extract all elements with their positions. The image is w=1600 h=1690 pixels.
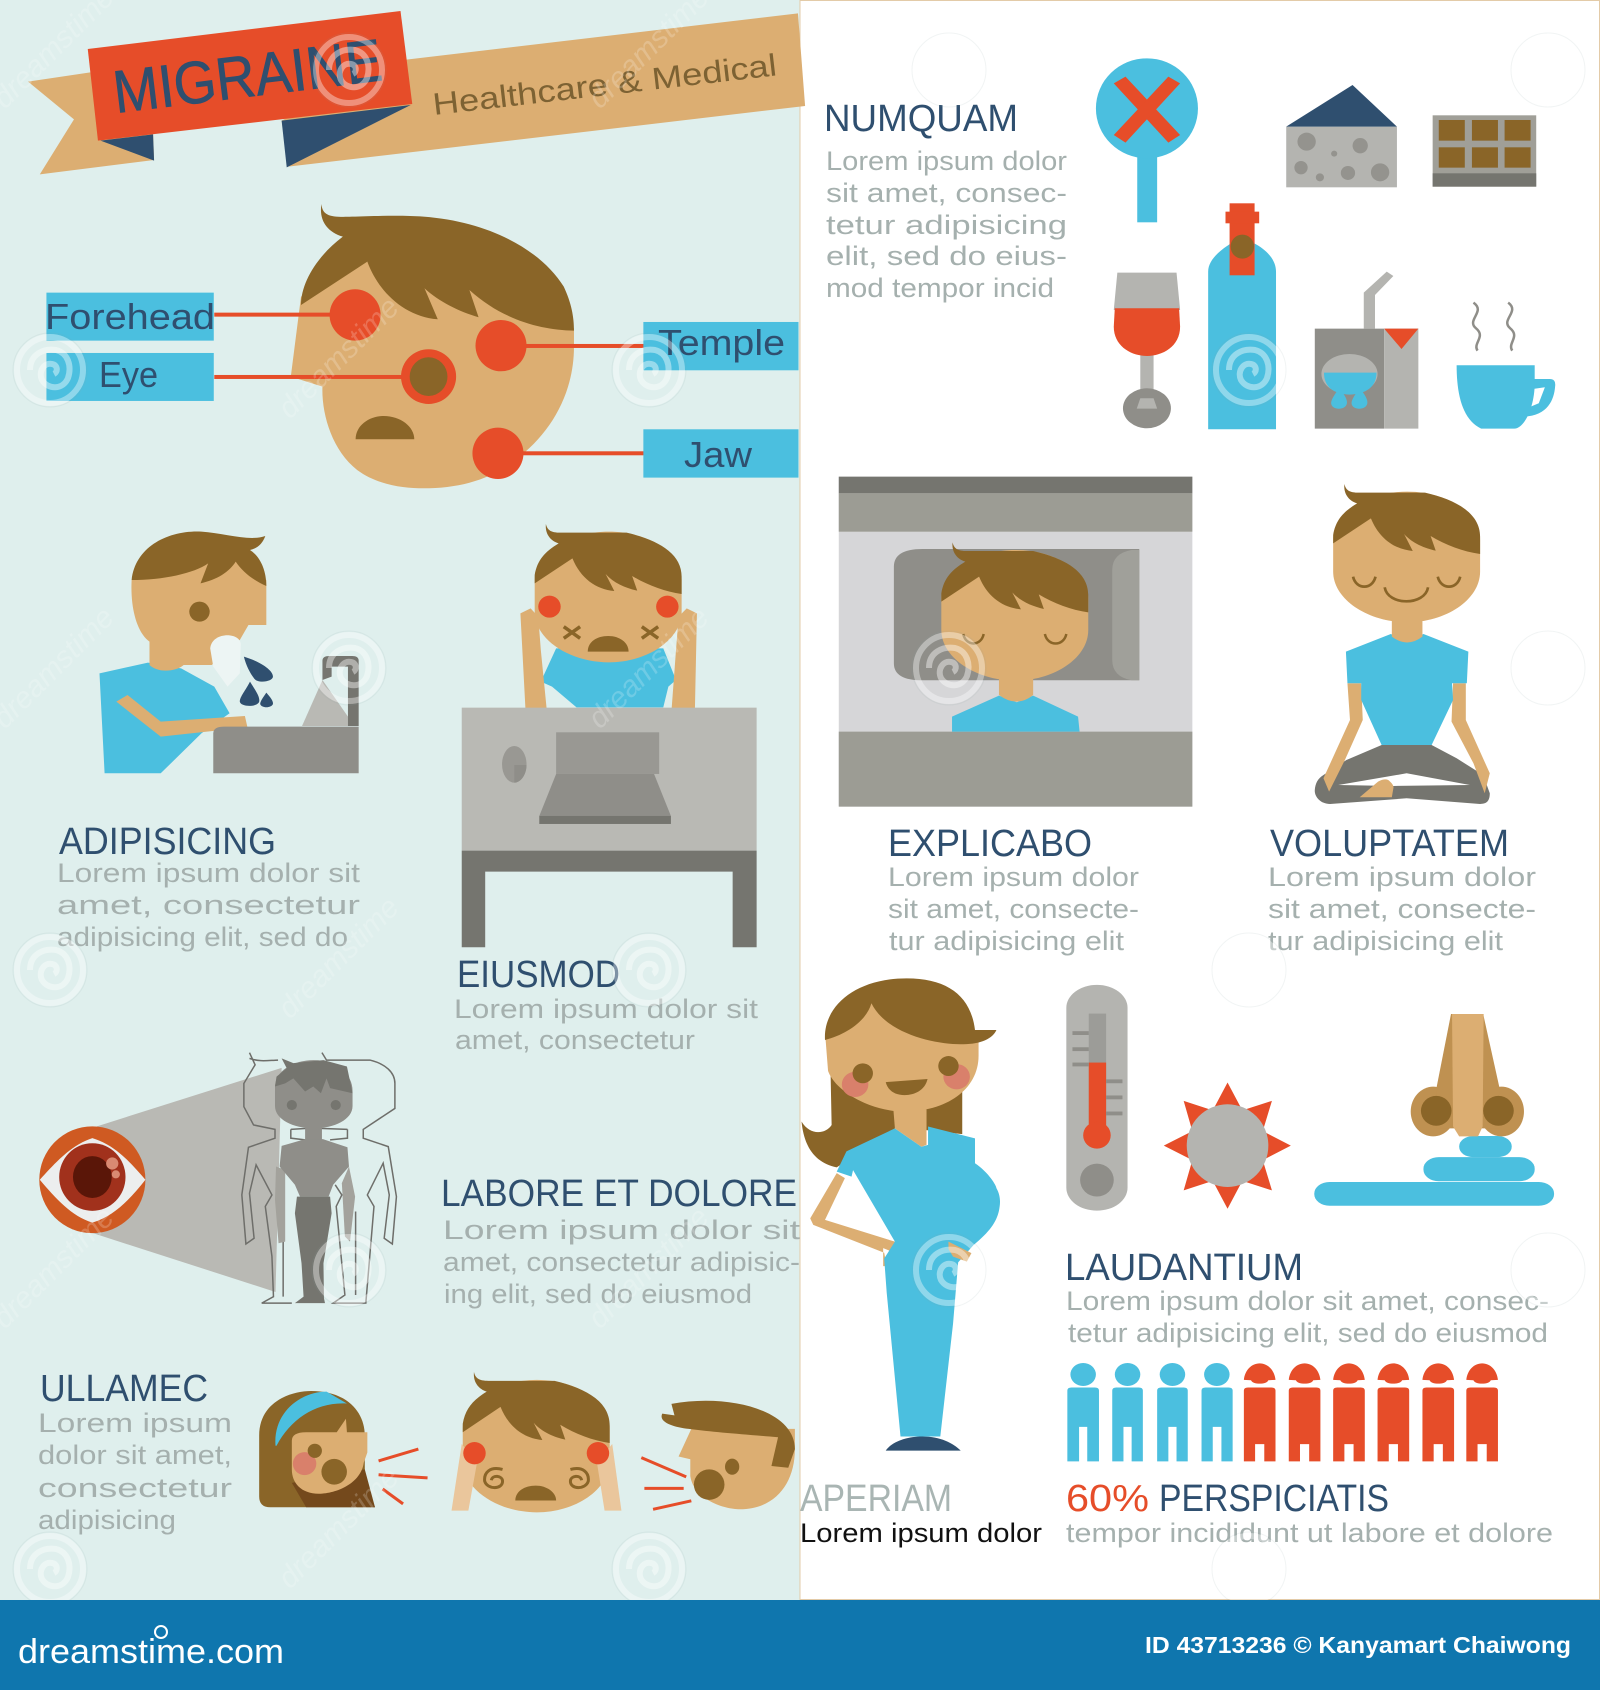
body text: Lorem ipsum dolor sit amet, consec- bbox=[1066, 1286, 1549, 1316]
stat: 60%: 60% bbox=[1066, 1478, 1149, 1520]
body text bbox=[826, 146, 1067, 303]
icon: wine glass bbox=[1114, 273, 1180, 428]
body text: tur adipisicing elit bbox=[1268, 926, 1504, 956]
body text: amet, consectetur bbox=[455, 1025, 695, 1055]
heading: LABORE ET DOLORE bbox=[441, 1173, 797, 1215]
heading: ULLAMEC bbox=[40, 1368, 208, 1410]
body text: adipisicing bbox=[38, 1505, 176, 1535]
body text: sit amet, consecte- bbox=[1268, 894, 1536, 924]
footer bar bbox=[0, 1600, 1600, 1690]
body text bbox=[1066, 1286, 1549, 1348]
body text: sit amet, consecte- bbox=[888, 894, 1139, 924]
panel: labore et dolore (double vision) bbox=[39, 1053, 801, 1309]
icon: bottle bbox=[1208, 203, 1276, 429]
blue people bbox=[1067, 1363, 1233, 1461]
icon: man sleeping in bed bbox=[839, 477, 1192, 807]
body text: Lorem ipsum dolor bbox=[1268, 862, 1536, 892]
body text bbox=[57, 858, 361, 952]
icon: hot cup bbox=[1457, 303, 1555, 429]
icon: cheese bbox=[1286, 85, 1397, 187]
icon: people shouting at man bbox=[259, 1372, 795, 1512]
icons bbox=[1066, 985, 1554, 1461]
right panel background bbox=[800, 0, 1600, 1600]
heading: ADIPISICING bbox=[59, 821, 276, 863]
watermark text: dreamstime bbox=[272, 891, 406, 1025]
body text: tur adipisicing elit bbox=[889, 926, 1125, 956]
panel: laudantium (thermometer, sun, nose) bbox=[1065, 985, 1554, 1548]
panel: voluptatem (meditating man) bbox=[1268, 484, 1536, 956]
heading: VOLUPTATEM bbox=[1270, 823, 1509, 865]
footer logo: dreamstime.com bbox=[18, 1633, 284, 1671]
panel: numquam (trigger foods) bbox=[824, 58, 1555, 429]
body text: tetur adipisicing elit, sed do eiusmod bbox=[1068, 1318, 1548, 1348]
red people bbox=[1244, 1363, 1498, 1461]
body text: mod tempor incid bbox=[826, 273, 1054, 303]
icon: milk carton bbox=[1315, 272, 1418, 429]
icon: man at sink bbox=[99, 532, 359, 773]
subtitle: Healthcare & Medical bbox=[431, 47, 779, 122]
chart: 10 people pictogram, 60 percent red bbox=[1067, 1363, 1498, 1461]
heading: NUMQUAM bbox=[824, 98, 1018, 140]
body text: Lorem ipsum dolor sit bbox=[443, 1215, 801, 1245]
caption: Lorem ipsum dolor bbox=[800, 1518, 1042, 1548]
logo mark bbox=[155, 1626, 167, 1638]
watermark text: dreamstime bbox=[582, 601, 716, 735]
label: jaw: Jaw bbox=[684, 434, 753, 475]
watermark text bbox=[0, 0, 716, 1595]
stat caption: tempor incididunt ut labore et dolore bbox=[1066, 1518, 1553, 1548]
icon: forbidden sign bbox=[1096, 58, 1198, 222]
heading: EIUSMOD bbox=[457, 954, 620, 996]
icon: thermometer bbox=[1066, 985, 1128, 1211]
body text: Lorem ipsum bbox=[38, 1408, 232, 1438]
body text: dolor sit amet, bbox=[38, 1440, 232, 1470]
body text: amet, consectetur adipisic- bbox=[443, 1247, 800, 1277]
icon: pregnant woman bbox=[802, 978, 1000, 1451]
body text bbox=[1268, 862, 1536, 956]
body text: tetur adipisicing bbox=[826, 210, 1067, 240]
body text bbox=[454, 994, 759, 1055]
panel: ullamec (noise sensitivity) bbox=[38, 1368, 795, 1535]
icon: sun bbox=[1164, 1082, 1291, 1209]
panel: explicabo (sleeping man) bbox=[839, 477, 1192, 956]
label: temple: Temple bbox=[658, 322, 785, 363]
panel: eiusmod (man at desk) bbox=[454, 524, 759, 1055]
body text bbox=[443, 1215, 801, 1309]
icon: chocolate bar bbox=[1433, 115, 1536, 187]
title: MIGRAINE bbox=[109, 26, 386, 126]
body text: Lorem ipsum dolor sit bbox=[454, 994, 759, 1024]
body text: ing elit, sed do eiusmod bbox=[444, 1279, 752, 1309]
body text: elit, sed do eius- bbox=[826, 241, 1067, 271]
left panel background bbox=[0, 0, 800, 1600]
label: forehead: Forehead bbox=[45, 296, 215, 337]
icon: runny nose bbox=[1314, 1014, 1554, 1206]
label: eye: Eye bbox=[99, 354, 158, 395]
body text bbox=[888, 862, 1139, 956]
footer credit: ID 43713236 © Kanyamart Chaiwong bbox=[1145, 1632, 1571, 1658]
watermark text: dreamstime bbox=[272, 1461, 406, 1595]
icon: man meditating bbox=[1315, 484, 1490, 804]
body text: Lorem ipsum dolor bbox=[826, 146, 1067, 176]
stat label: PERSPICIATIS bbox=[1159, 1478, 1389, 1520]
panel: aperiam (pregnant woman) bbox=[800, 978, 1042, 1548]
icons: forbidden sign, cheese, chocolate, wine, bottle, milk, coffee bbox=[1096, 58, 1555, 429]
heading: EXPLICABO bbox=[888, 823, 1092, 865]
panel: adipisicing (vomiting man) bbox=[57, 532, 361, 952]
face illustration bbox=[46, 204, 798, 488]
face diagram: pain locations bbox=[45, 204, 798, 488]
icon: man with headache at laptop bbox=[462, 524, 757, 947]
icon: eye with beam and blurred figures bbox=[39, 1053, 396, 1303]
title banner bbox=[28, 11, 805, 174]
body text: sit amet, consec- bbox=[826, 178, 1067, 208]
watermark text: dreamstime bbox=[272, 291, 406, 425]
body text: Lorem ipsum dolor bbox=[888, 862, 1139, 892]
body text: adipisicing elit, sed do bbox=[57, 922, 348, 952]
heading: LAUDANTIUM bbox=[1065, 1247, 1303, 1289]
body text: amet, consectetur bbox=[57, 890, 360, 920]
body text: Lorem ipsum dolor sit bbox=[57, 858, 361, 888]
ribbon shapes bbox=[28, 11, 805, 174]
watermark text: dreamstime bbox=[582, 1201, 716, 1335]
body text bbox=[38, 1408, 232, 1535]
heading: APERIAM bbox=[800, 1478, 952, 1520]
body text: consectetur bbox=[38, 1473, 232, 1503]
